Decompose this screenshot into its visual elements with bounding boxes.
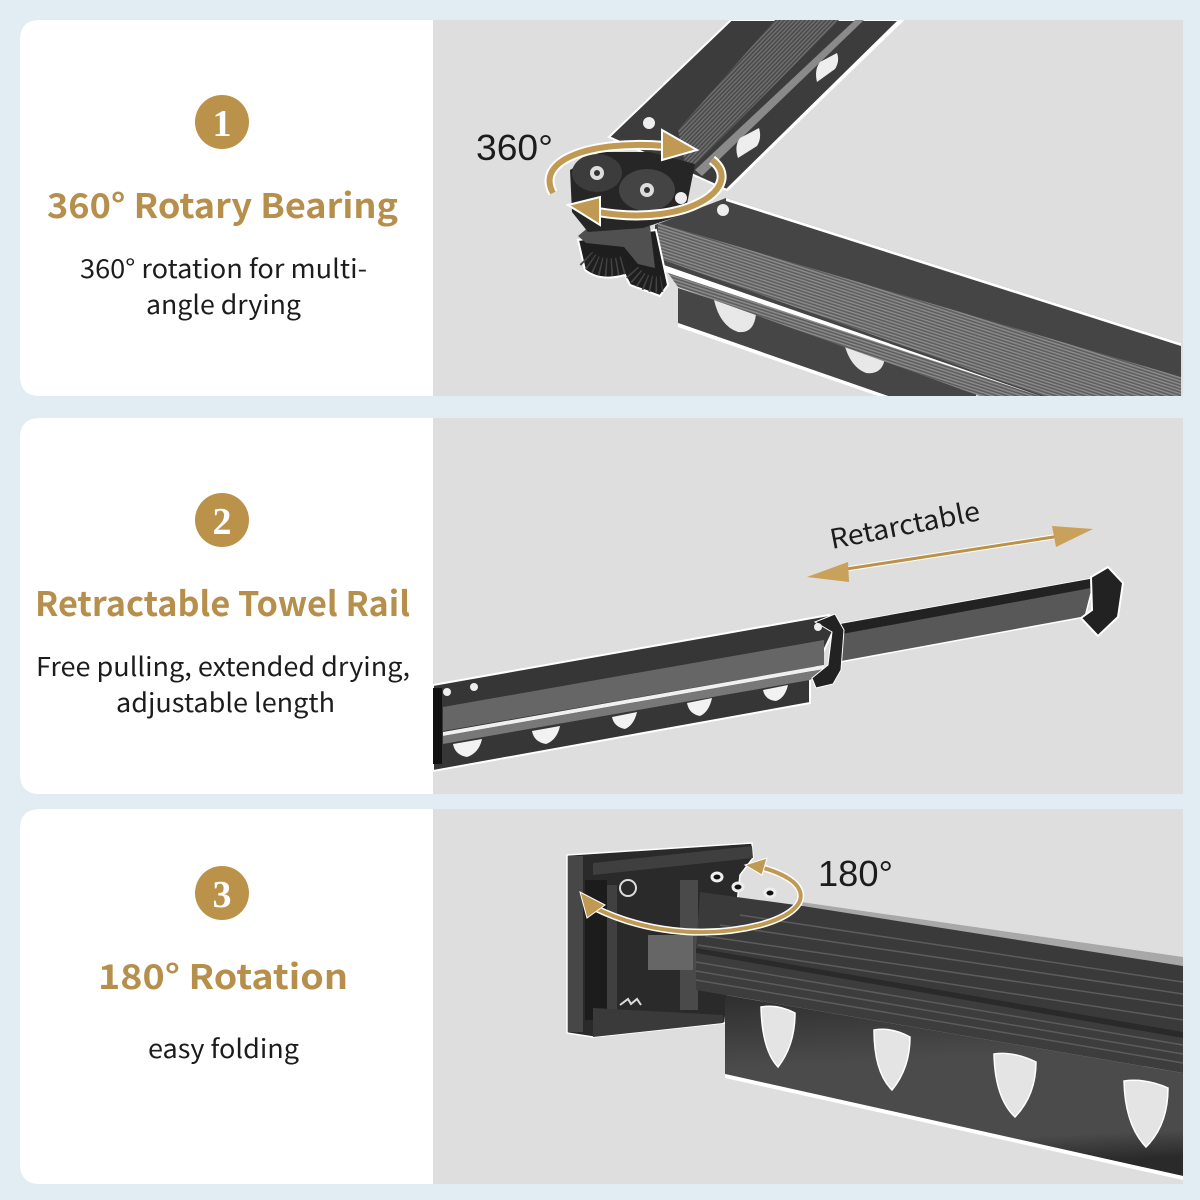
outer rail with hooks [433, 615, 836, 771]
description text: 360° rotation for multi- [80, 249, 367, 286]
collar [812, 614, 844, 688]
number badge 1: 1 [212, 103, 232, 145]
number badge 3: 3 [212, 874, 232, 916]
heading: 360 rotary bearing: 360° Rotary Bearing [47, 179, 398, 228]
heading: retractable towel rail: Retractable Towel Rail [35, 577, 410, 626]
rotation arrow [580, 858, 801, 932]
illustration: wall bracket and rail [567, 843, 1183, 1180]
panel: 180 rotation [20, 809, 1183, 1184]
panel: 360 rotary bearing [20, 20, 1183, 396]
lower arm [655, 198, 1181, 396]
rotation arrows [550, 130, 722, 225]
label: 180 degrees: 180° [818, 853, 893, 894]
description text [36, 647, 410, 720]
number badge 2: 2 [212, 501, 232, 543]
photo background [433, 809, 1183, 1184]
text card background [20, 20, 433, 396]
double arrow [807, 526, 1093, 582]
text card background [20, 809, 433, 1184]
number badge 2 [195, 493, 249, 547]
number badge 1 [195, 95, 249, 149]
description text: easy folding [148, 1029, 299, 1066]
panel: retractable towel rail [20, 418, 1183, 794]
photo background [433, 20, 1183, 396]
photo background [433, 418, 1183, 794]
description text: adjustable length [116, 683, 335, 720]
description text: angle drying [146, 285, 301, 322]
description text [80, 249, 367, 322]
inner rod [840, 567, 1123, 662]
description text: Free pulling, extended drying, [36, 647, 410, 684]
illustration: rotating bracket arms [550, 20, 1181, 396]
number badge 3 [195, 866, 249, 920]
label: 360 degrees: 360° [476, 127, 553, 168]
illustration: telescopic rail [433, 490, 1123, 771]
heading: 180 rotation: 180° Rotation [98, 950, 348, 999]
text card background [20, 418, 433, 794]
label: retarctable: Retarctable [826, 490, 983, 557]
bearing knobs [570, 152, 695, 296]
wall plate [567, 843, 775, 1037]
upper arm [609, 20, 903, 190]
rail body [696, 892, 1183, 1180]
